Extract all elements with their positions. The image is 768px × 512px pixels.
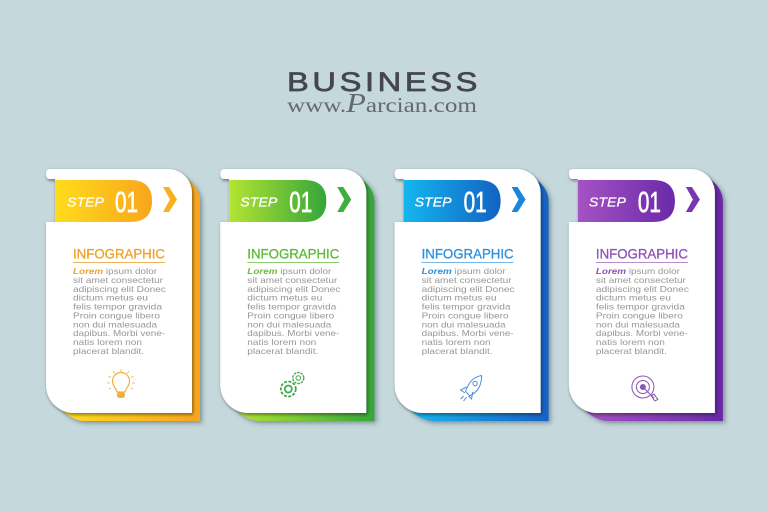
text block: dapibus. Morbi vene- (247, 329, 340, 338)
text block: Lorem ipsum dolor (422, 267, 506, 276)
text block: placerat blandit. (73, 347, 144, 356)
icon: light bulb (107, 369, 135, 398)
text block: natis lorem non (247, 338, 317, 347)
text block: adipiscing elit Donec (422, 285, 515, 294)
card back layer (236, 176, 374, 421)
text block: Proin congue libero (73, 312, 161, 320)
card back layer (585, 176, 723, 421)
text block: Proin congue libero (422, 312, 509, 320)
text block: natis lorem non (596, 338, 665, 347)
text block: dictum metus eu (73, 294, 149, 302)
text block: placerat blandit. (422, 347, 493, 356)
step tab (55, 180, 152, 222)
step tab (404, 180, 501, 222)
step tab: 01 (638, 187, 661, 219)
text block: adipiscing elit Donec (247, 285, 340, 294)
text block: Proin congue libero (596, 312, 683, 320)
text block: natis lorem non (73, 338, 143, 347)
icon: chevron (337, 187, 351, 212)
text block: dapibus. Morbi vene- (422, 329, 514, 338)
icon: chevron (686, 187, 700, 212)
text block: sit amet consectetur (73, 276, 163, 285)
text block: dictum metus eu (422, 294, 497, 302)
card back layer (411, 176, 549, 421)
text block: Lorem ipsum dolor (73, 267, 157, 276)
text block: natis lorem non (422, 338, 491, 347)
icon: rocket (461, 376, 482, 401)
text block: placerat blandit. (596, 347, 667, 356)
panel: step card purple (569, 169, 723, 421)
text block: felis tempor gravida (73, 302, 163, 312)
title: BUSINESS (287, 67, 481, 97)
text block: sit amet consectetur (247, 276, 338, 285)
card back layer (62, 176, 200, 421)
step tab: 01 (464, 187, 487, 219)
panel: step card green (220, 169, 374, 421)
text block: felis tempor gravida (422, 302, 511, 312)
heading: INFOGRAPHIC (73, 246, 165, 262)
step tab (229, 180, 326, 222)
text block: non dui malesuada (73, 320, 158, 330)
icon: chevron (512, 187, 526, 212)
text block: dictum metus eu (247, 294, 323, 302)
text block: Lorem ipsum dolor (596, 267, 680, 276)
text block (73, 267, 166, 356)
text block: felis tempor gravida (247, 302, 337, 312)
heading: INFOGRAPHIC (422, 246, 514, 262)
title: www. Parcian.com (287, 88, 477, 118)
text block: dictum metus eu (596, 294, 671, 302)
text block: adipiscing elit Donec (73, 285, 166, 294)
text block: sit amet consectetur (422, 276, 512, 285)
text block (422, 267, 515, 356)
step tab: STEP (589, 194, 626, 210)
text block (596, 267, 689, 356)
card face (220, 169, 366, 413)
card face (569, 169, 715, 413)
text block: dapibus. Morbi vene- (596, 329, 688, 338)
text block: dapibus. Morbi vene- (73, 329, 165, 338)
text block: Proin congue libero (247, 312, 335, 320)
step tab: STEP (415, 194, 452, 210)
text block: non dui malesuada (247, 320, 332, 330)
icon: gears (281, 372, 304, 396)
text block: adipiscing elit Donec (596, 285, 689, 294)
card face (395, 169, 541, 413)
step tab: 01 (289, 187, 312, 219)
text block: placerat blandit. (247, 347, 318, 356)
heading: INFOGRAPHIC (596, 246, 688, 262)
text block: Lorem ipsum dolor (247, 267, 332, 276)
step tab: STEP (240, 194, 278, 210)
heading: INFOGRAPHIC (247, 246, 339, 262)
step tab: STEP (67, 194, 104, 210)
step tab: 01 (115, 187, 138, 219)
text block: felis tempor gravida (596, 302, 685, 312)
text block: sit amet consectetur (596, 276, 686, 285)
text block: non dui malesuada (596, 320, 680, 330)
icon: target (632, 376, 658, 401)
icon: chevron (163, 187, 177, 212)
panel: step card yellow (46, 169, 200, 421)
panel: step card blue (395, 169, 549, 421)
card face (46, 169, 192, 413)
text block: non dui malesuada (422, 320, 506, 330)
step tab (578, 180, 675, 222)
text block (247, 267, 340, 356)
title (287, 67, 481, 118)
